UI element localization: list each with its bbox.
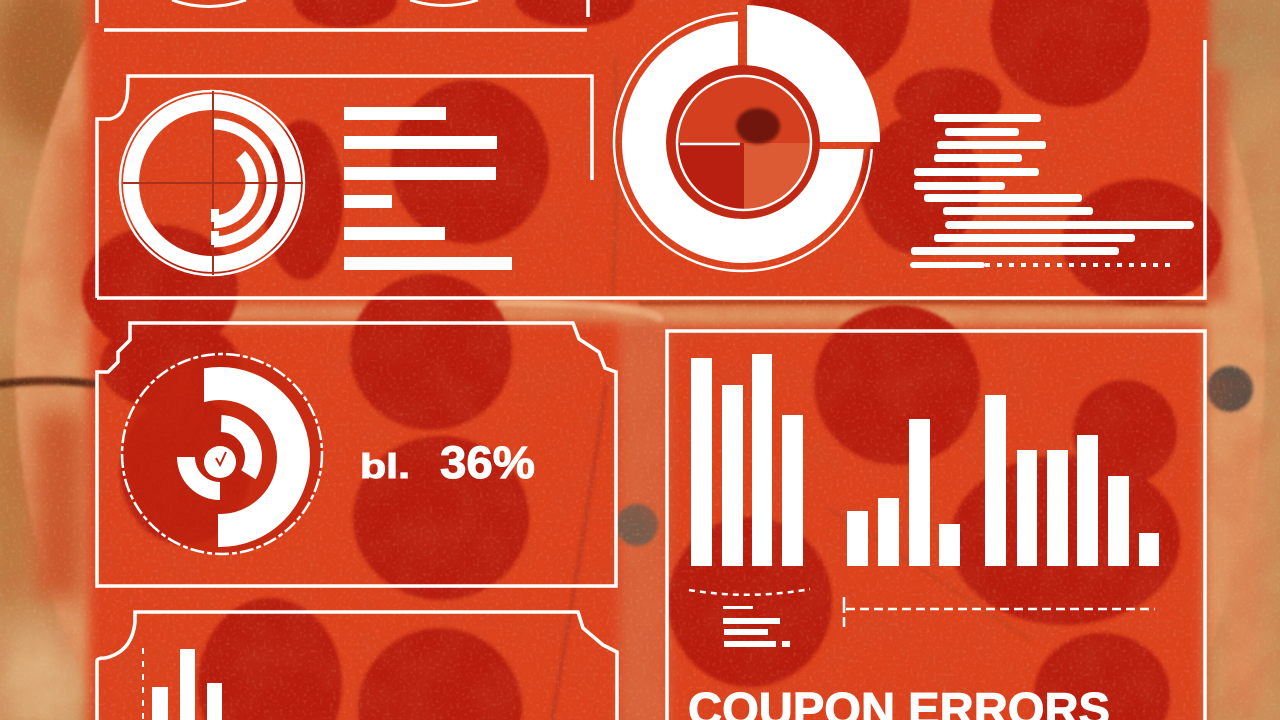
value: 36%: 36% bbox=[440, 437, 535, 488]
radial gauge bbox=[122, 354, 322, 554]
inner quadrants bbox=[678, 77, 810, 209]
panel frame bbox=[667, 331, 1205, 720]
cropped gauge arcs bbox=[172, 0, 478, 6]
panel: percentage gauge bbox=[97, 323, 616, 586]
bar chart bbox=[691, 354, 1159, 566]
dotted axis bbox=[142, 648, 144, 720]
toppings: olives bbox=[1207, 366, 1253, 412]
vertical bars bbox=[152, 649, 222, 720]
mini legend bbox=[689, 589, 810, 647]
panel frame bbox=[97, 612, 617, 720]
gauge: concentric rings bbox=[120, 91, 304, 275]
panel frame bbox=[97, 40, 1205, 298]
large donut chart bbox=[614, 13, 872, 271]
panel: gauge and bars bbox=[97, 40, 1205, 298]
text lines block bbox=[910, 114, 1194, 268]
dashed axis bbox=[844, 597, 1155, 627]
label: bl. bbox=[360, 448, 410, 486]
horizontal bars bbox=[344, 107, 512, 270]
panel: coupon errors bbox=[667, 331, 1205, 720]
panel frame bbox=[97, 323, 616, 586]
panel: bottom left cropped bar chart bbox=[97, 612, 617, 720]
panel: top cropped frame bbox=[97, 0, 588, 30]
red tinted side zones bbox=[35, 130, 1262, 710]
